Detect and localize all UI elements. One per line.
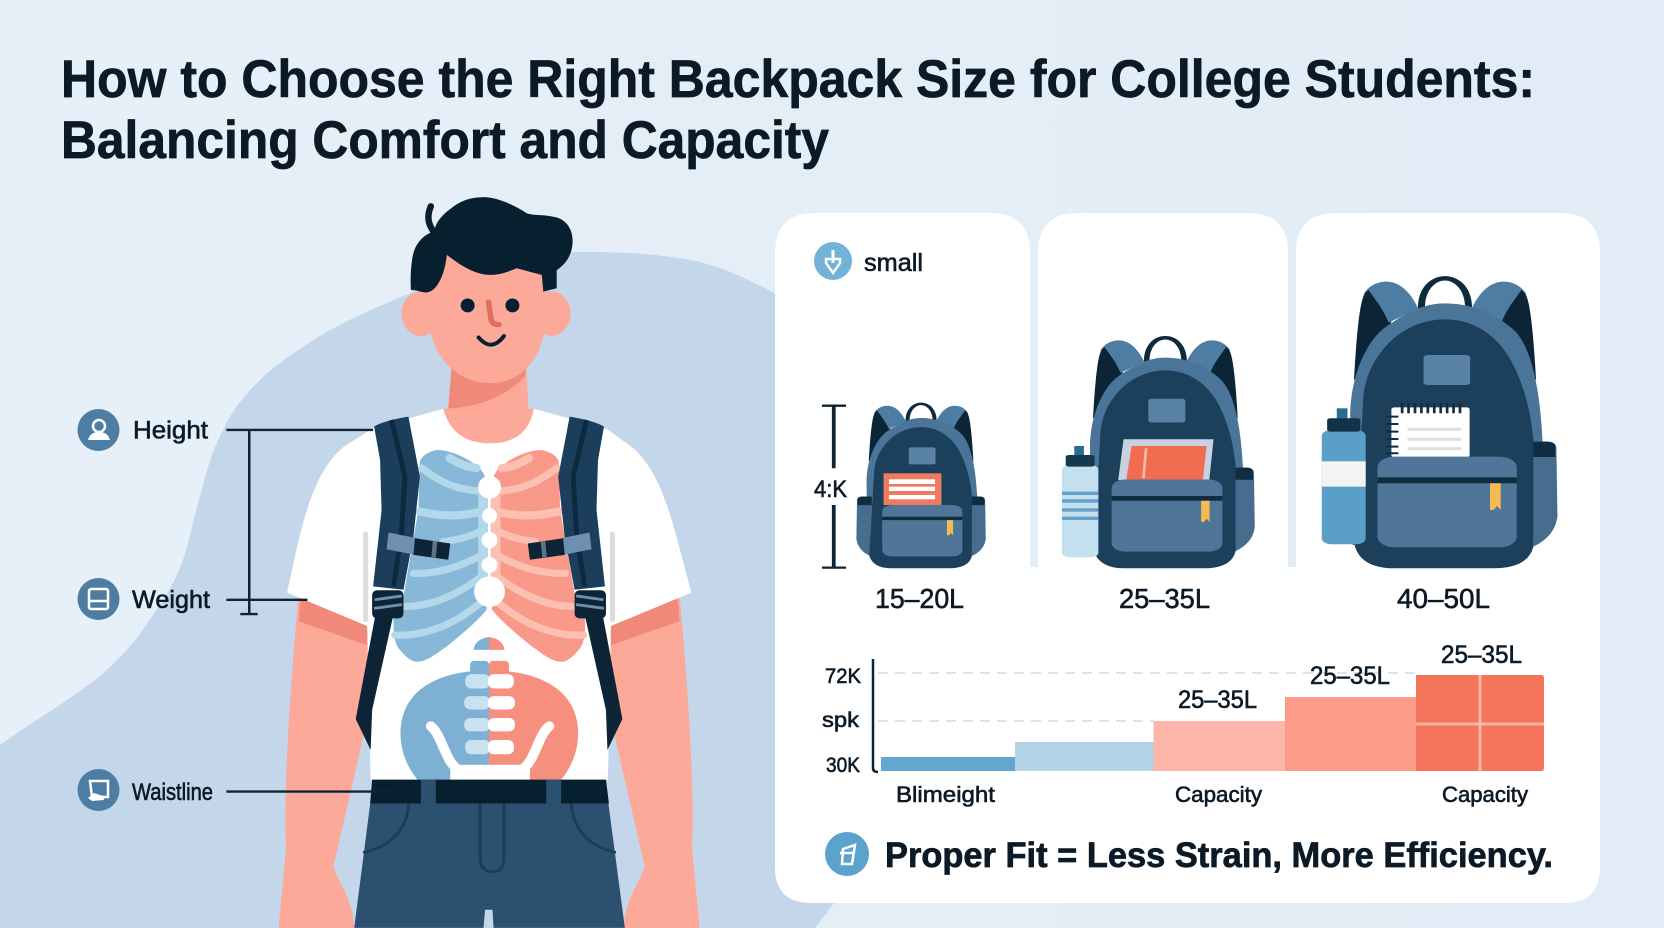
small size header — [814, 242, 923, 280]
dimension bracket — [822, 406, 846, 568]
size labels — [875, 583, 1490, 614]
head — [401, 197, 573, 383]
label: Weight — [78, 578, 210, 620]
water bottle: blue — [1322, 408, 1366, 544]
size labels: 15–20L — [875, 583, 964, 614]
gridlines — [878, 673, 1416, 721]
measurement lines — [226, 430, 391, 792]
card: medium — [1038, 213, 1288, 570]
y axis labels — [822, 665, 861, 777]
size labels: 40–50L — [1397, 583, 1490, 614]
label: Height — [78, 409, 208, 451]
icon: person — [78, 409, 120, 451]
label: Waistline: Waistline — [132, 779, 213, 806]
icon: bottle — [825, 832, 869, 876]
spiral notebook — [1386, 403, 1470, 457]
t-shirt — [287, 409, 692, 780]
x axis labels: Capacity — [1442, 782, 1528, 807]
face — [461, 299, 519, 345]
size labels: 25–35L — [1119, 583, 1210, 614]
bracket label: 4:K — [814, 476, 847, 503]
icon: scale — [78, 578, 120, 620]
callout: proper fit: Proper Fit = Less Strain, More Efficiency. — [885, 836, 1553, 875]
illustrated student figure — [279, 197, 699, 928]
background blob — [0, 252, 880, 928]
chest strap clips — [387, 533, 592, 560]
bar labels: 25–35L — [1178, 686, 1257, 714]
tablet — [1118, 439, 1214, 480]
pelvis and lower spine — [400, 637, 578, 780]
bar labels — [1178, 641, 1522, 714]
panel bottom white — [775, 567, 1600, 903]
small backpack — [856, 404, 986, 568]
title: Balancing Comfort and Capacity — [61, 111, 829, 170]
ribcage — [394, 450, 585, 662]
title: How to Choose the Right Backpack Size for College Students: — [61, 50, 1535, 109]
water bottle: light — [1062, 446, 1098, 557]
pants details — [363, 803, 616, 872]
bar chart — [822, 641, 1544, 807]
bars — [881, 675, 1544, 771]
pants — [354, 800, 625, 928]
x axis labels: Blimeight — [896, 782, 995, 807]
large backpack — [1322, 278, 1557, 568]
x axis labels — [896, 782, 1528, 807]
arms — [279, 595, 699, 928]
bar labels: 25–35L — [1441, 641, 1522, 669]
title — [61, 50, 1535, 170]
y axis labels: 72K — [825, 665, 861, 688]
y axis labels: 30K — [826, 754, 860, 777]
medium backpack — [1062, 338, 1255, 568]
backpacks — [822, 278, 1557, 568]
card: large — [1296, 213, 1600, 570]
panel: backpack sizes and chart — [775, 213, 1600, 903]
y axis labels: spk — [822, 709, 860, 732]
backpack straps — [356, 417, 622, 750]
x axis labels: Capacity — [1175, 782, 1262, 807]
label: Weight: Weight — [132, 586, 210, 614]
bar labels: 25–35L — [1310, 662, 1390, 690]
icon: down arrow — [814, 242, 852, 280]
notebook: red — [884, 473, 941, 505]
icon: waist — [78, 769, 120, 811]
belt — [370, 780, 609, 803]
shirt fold lines — [366, 534, 612, 620]
neck — [443, 366, 534, 443]
small size header: small — [864, 249, 923, 277]
card: small — [775, 213, 1030, 570]
axis — [873, 659, 878, 772]
label: Height: Height — [133, 416, 208, 444]
label: Waistline — [78, 769, 213, 811]
hair — [411, 197, 573, 292]
